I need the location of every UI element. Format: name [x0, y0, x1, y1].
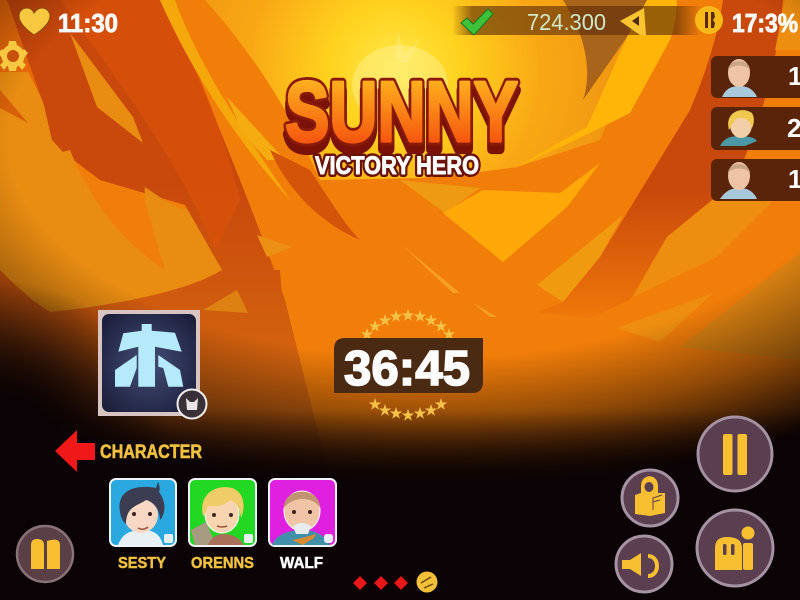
icon: green check — [461, 9, 493, 35]
star ring: ★ — [379, 402, 392, 418]
character card: Orenns — [189, 479, 256, 546]
timer plate — [334, 338, 483, 393]
icon: heart — [19, 8, 50, 35]
character card: Sesty — [110, 479, 176, 546]
character ability icon — [98, 310, 206, 418]
button: lock — [622, 470, 678, 526]
star ring: ★ — [379, 312, 392, 328]
leaderboard panel — [711, 56, 800, 201]
icon: blue glyph — [115, 324, 183, 387]
percentage stat — [695, 6, 798, 38]
star ring: ★ — [390, 308, 403, 324]
icon: yellow triangle — [620, 8, 646, 35]
currency bar — [452, 6, 702, 35]
button: pause — [698, 417, 772, 491]
label: SESTY: SESTY — [118, 555, 166, 572]
star ring: ★ — [402, 407, 415, 423]
star ring: ★ — [443, 326, 456, 342]
subtitle: VICTORY HERO: VICTORY HERO — [315, 152, 479, 180]
star ring: ★ — [414, 308, 427, 324]
badge — [178, 390, 206, 418]
icon: settings gear — [0, 41, 28, 71]
clock time: 11:30 — [58, 8, 118, 38]
label: WALF: WALF — [280, 555, 323, 572]
timer value: 36:45 — [344, 342, 470, 396]
title: SUNNY: SUNNY — [285, 73, 518, 168]
star ring: ★ — [435, 396, 448, 412]
character card: Walf — [269, 479, 336, 546]
star ring: ★ — [414, 405, 427, 421]
heading: CHARACTER: CHARACTER — [100, 442, 202, 463]
star ring: ★ — [390, 405, 403, 421]
subtitle: VICTORY HERO: VICTORY HERO — [315, 152, 479, 180]
star ring: ★ — [402, 307, 415, 323]
star ring: ★ — [369, 396, 382, 412]
label: ORENNS: ORENNS — [191, 555, 254, 572]
currency amount: 724.300 — [527, 9, 606, 35]
status: lives and clock — [19, 8, 118, 38]
star ring: ★ — [425, 312, 438, 328]
button: info — [697, 510, 773, 586]
rank row 2 — [711, 107, 800, 150]
star ring: ★ — [369, 318, 382, 334]
page indicators — [353, 572, 438, 592]
rank row 3 — [711, 159, 800, 201]
star ring: ★ — [425, 402, 438, 418]
button: bottom left pause — [17, 526, 73, 582]
star ring — [361, 307, 456, 423]
title: SUNNY: SUNNY — [285, 65, 518, 160]
rank row 1 — [711, 56, 800, 98]
button: sound — [616, 536, 672, 592]
star ring: ★ — [361, 326, 374, 342]
arrow: red left — [55, 430, 95, 472]
icon: coin — [695, 6, 723, 34]
icon: yellow coin — [416, 572, 438, 592]
timer with star ring — [334, 307, 483, 423]
title logo — [285, 65, 518, 180]
star ring: ★ — [435, 318, 448, 334]
title: SUNNY: SUNNY — [285, 65, 518, 160]
